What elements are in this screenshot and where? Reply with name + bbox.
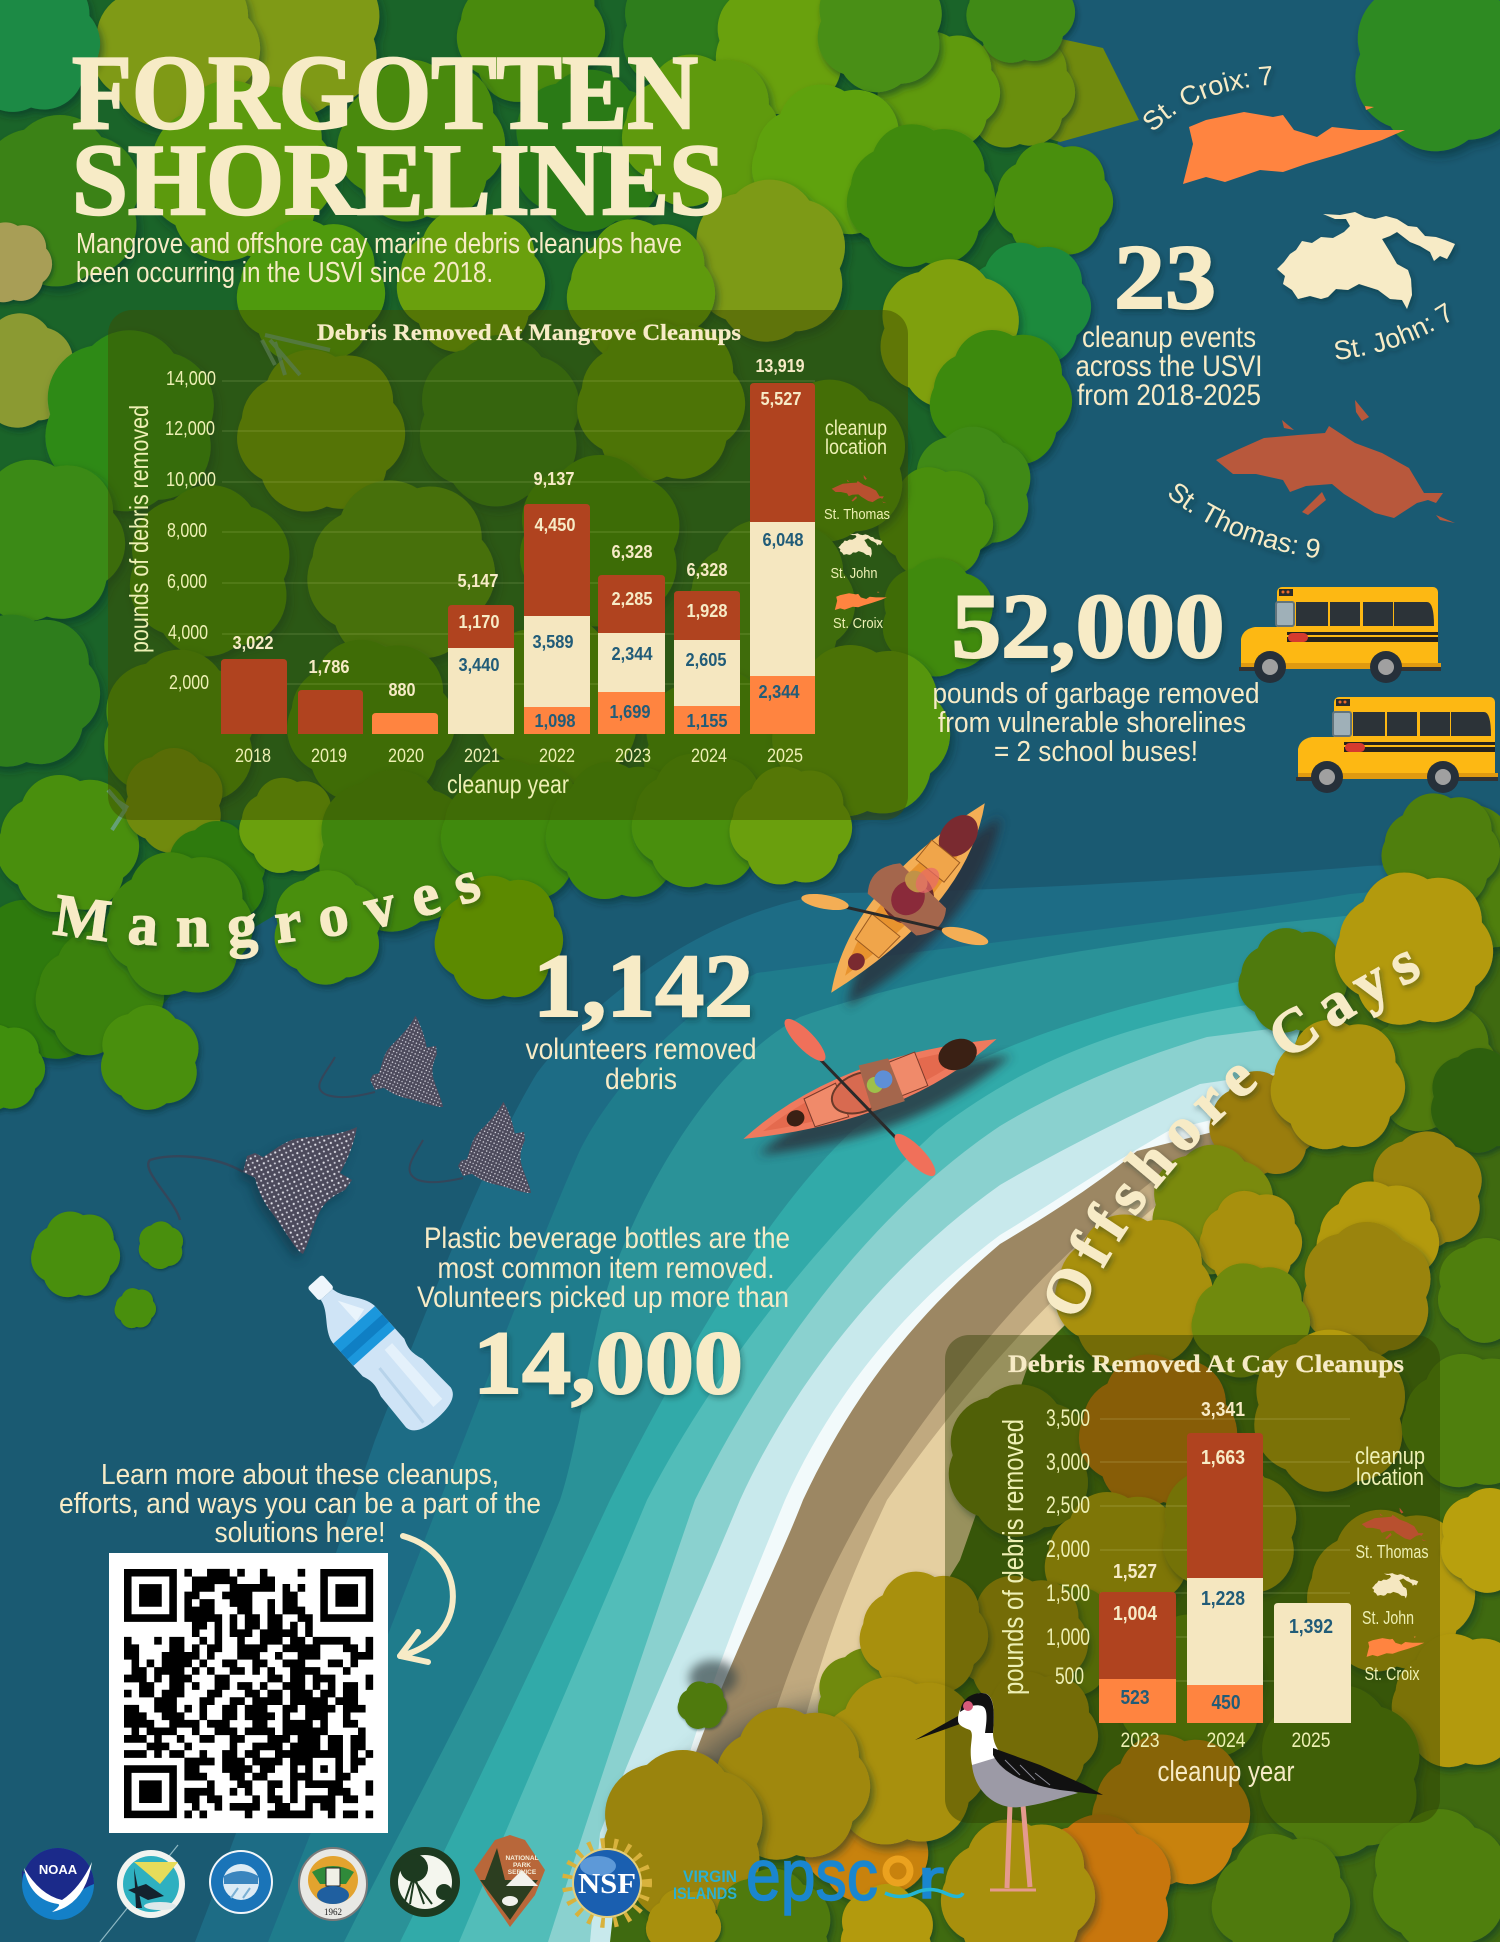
bar value labels: 4,450	[534, 515, 576, 535]
stat: 1,142 volunteers: debris	[605, 1063, 677, 1096]
bar value labels: 9,137	[534, 469, 574, 489]
legend: St. Thomas	[1356, 1542, 1428, 1562]
x axis: 2024	[1206, 1729, 1246, 1752]
bar value labels: 6,328	[686, 560, 728, 580]
logo: NSF	[567, 1843, 647, 1923]
logo: NOAA: NOAA	[39, 1862, 78, 1877]
x axis: 2020	[388, 746, 424, 767]
stat: 52,000 pounds: pounds of garbage removed	[932, 678, 1260, 710]
logo: National Park Service: SERVICE	[508, 1869, 537, 1876]
bar value labels: 1,928	[686, 601, 728, 621]
logo: Virgin Islands EPSCoR: ISLANDS	[673, 1884, 737, 1903]
bar value labels: 2,285	[612, 589, 652, 609]
bar value labels: 3,341	[1201, 1399, 1245, 1421]
bar value labels: 1,663	[1201, 1447, 1245, 1469]
bar value labels: 1,155	[686, 711, 728, 731]
legend: cleanup	[825, 417, 887, 440]
panel: mangrove chart backdrop	[108, 310, 908, 820]
island map: St. Croix	[1144, 66, 1405, 184]
call to action text: Learn more about these cleanups,	[101, 1459, 499, 1491]
QR code	[109, 1553, 388, 1833]
icon: school bus 2	[1296, 697, 1498, 793]
y axis: 2,500	[1046, 1492, 1090, 1519]
logo: National Park Service: PARK	[513, 1862, 531, 1869]
island map: St. Thomas: St. Thomas: 9	[1169, 484, 1324, 562]
chart: debris removed at mangrove cleanups	[124, 320, 890, 799]
legend: St. Thomas	[824, 506, 890, 523]
legend: cleanup	[1355, 1443, 1425, 1470]
y axis: 6,000	[167, 571, 207, 593]
stat: 1,142 volunteers	[526, 937, 756, 1096]
subtitle: been occurring in the USVI since 2018.	[76, 257, 493, 289]
bar value labels: 1,786	[308, 657, 350, 677]
bar value labels: 5,147	[458, 571, 498, 591]
stat: 23 cleanup events: from 2018-2025	[1077, 379, 1261, 412]
y axis: 1,000	[1046, 1624, 1090, 1651]
illustration: red kayak	[734, 1014, 1020, 1181]
x axis: cleanup year	[447, 769, 569, 799]
panel: cay chart backdrop	[945, 1335, 1440, 1823]
bar value labels: 3,440	[458, 655, 500, 675]
stat: plastic bottles text: Volunteers picked up more than	[417, 1281, 789, 1314]
y axis: 2,000	[169, 672, 209, 694]
illustration: black-necked stilt bird	[915, 1693, 1103, 1890]
palm frond leaves	[108, 335, 330, 830]
island map: St. Thomas	[1169, 400, 1455, 562]
illustration: eagle ray small top	[319, 1016, 472, 1133]
illustration: orange kayak	[800, 778, 1021, 1023]
y axis: pounds of debris removed	[998, 1419, 1030, 1695]
y axis: 4,000	[168, 622, 208, 644]
logo: Department of Planning and Natural Resources	[117, 1850, 185, 1918]
section label: Mangroves	[52, 872, 485, 964]
x axis: 2024	[691, 746, 727, 767]
stat: 23 cleanup events: 23	[1114, 226, 1216, 328]
x axis: 2025	[1292, 1729, 1330, 1752]
logo: NSF: NSF	[578, 1868, 636, 1900]
title: SHORELINES	[72, 124, 725, 237]
logo: Center for Marine and Environmental Studies	[209, 1850, 273, 1914]
island map: St. John: St. John: 7	[1335, 302, 1452, 364]
y axis: 12,000	[165, 418, 215, 440]
bar value labels: 1,004	[1113, 1603, 1158, 1625]
bar value labels: 1,228	[1201, 1588, 1245, 1610]
stat: 23 cleanup events: across the USVI	[1076, 350, 1262, 383]
section label: Offshore Cays: Offshore Cays	[1046, 951, 1424, 1320]
logo: University of the Virgin Islands: 1962	[324, 1907, 342, 1917]
x axis	[1120, 1729, 1330, 1788]
y axis: 3,500	[1046, 1405, 1090, 1432]
y axis: 14,000	[166, 368, 216, 390]
x axis	[235, 746, 803, 799]
stat: 1,142 volunteers: 1,142	[533, 937, 753, 1036]
title	[72, 34, 725, 237]
bar value labels: 13,919	[756, 356, 804, 376]
stacked bars	[221, 383, 815, 734]
logo: National Park Service: NATIONAL	[505, 1855, 539, 1862]
stat: 52,000 pounds	[932, 575, 1260, 768]
stat: 52,000 pounds: from vulnerable shorelines	[938, 707, 1246, 739]
legend: location	[825, 436, 887, 459]
bar value labels: 2,344	[758, 682, 800, 702]
legend: St. John	[830, 565, 878, 582]
y axis: pounds of debris removed	[124, 405, 154, 653]
bar value labels: 1,170	[458, 612, 500, 632]
subtitle	[76, 228, 682, 289]
legend: St. Croix	[1364, 1664, 1420, 1684]
icon: school bus 1	[1239, 587, 1441, 683]
chart title: Debris Removed At Mangrove Cleanups	[317, 320, 741, 345]
call to action text	[59, 1459, 541, 1549]
logo: Virgin Islands EPSCoR: r	[918, 1847, 944, 1910]
bar value labels: 2,344	[612, 644, 652, 664]
title: FORGOTTEN	[72, 34, 698, 151]
island map: St. Croix: St. Croix: 7	[1144, 66, 1274, 134]
x axis: 2023	[615, 746, 651, 767]
legend	[824, 417, 890, 632]
x axis: 2018	[235, 746, 271, 767]
stat: plastic bottles text: 14,000	[473, 1314, 743, 1413]
icon: plastic bottle	[292, 1261, 460, 1438]
partner logos	[22, 1835, 963, 1927]
bar value labels: 3,022	[232, 633, 274, 653]
stat: plastic bottles text: most common item removed.	[438, 1252, 774, 1285]
y axis: 2,000	[1046, 1536, 1090, 1563]
bar value labels: 5,527	[760, 389, 802, 409]
stat: plastic bottles text: Plastic beverage bottles are the	[424, 1222, 790, 1255]
stat: 23 cleanup events	[1076, 226, 1262, 412]
call to action text: solutions here!	[214, 1517, 386, 1549]
bar value labels	[232, 356, 804, 731]
logo: Virgin Islands EPSCoR: VIRGIN	[683, 1867, 737, 1886]
island map: St. John	[1277, 212, 1458, 364]
stat: 1,142 volunteers: volunteers removed	[526, 1033, 756, 1066]
illustration: eagle ray large	[148, 1127, 357, 1260]
bar value labels: 1,527	[1113, 1561, 1157, 1583]
x axis: cleanup year	[1158, 1756, 1295, 1788]
section label: Mangroves: Mangroves	[52, 872, 485, 964]
bar value labels: 2,605	[686, 650, 726, 670]
y axis: 500	[1055, 1663, 1084, 1690]
stacked bars	[1099, 1433, 1351, 1723]
x axis: 2021	[464, 746, 500, 767]
x axis: 2019	[311, 746, 347, 767]
stat: 52,000 pounds: = 2 school buses!	[994, 736, 1198, 768]
logo: University of the Virgin Islands	[299, 1848, 367, 1920]
logo: NOAA	[22, 1848, 94, 1920]
call to action text: efforts, and ways you can be a part of the	[59, 1488, 541, 1520]
chart: debris removed at cay cleanups	[998, 1351, 1428, 1788]
legend: location	[1356, 1464, 1424, 1491]
bar value labels: 6,328	[612, 542, 652, 562]
stat: 23 cleanup events: cleanup events	[1082, 321, 1256, 354]
logo: National Park Service	[474, 1835, 545, 1927]
y axis: 3,000	[1046, 1449, 1090, 1476]
mangrove tree canopy	[0, 0, 1500, 1110]
y axis	[998, 1405, 1350, 1695]
legend: St. John	[1362, 1608, 1414, 1628]
bar value labels	[1113, 1399, 1333, 1714]
legend	[1355, 1443, 1428, 1684]
small mangrove islets	[31, 1212, 727, 1729]
bar value labels: 1,098	[534, 711, 576, 731]
y axis: 1,500	[1046, 1580, 1090, 1607]
stat: 52,000 pounds: 52,000	[952, 575, 1224, 677]
bar value labels: 1,392	[1289, 1616, 1333, 1638]
y axis: 8,000	[167, 520, 207, 542]
logo: Mangrove marine sanctuary	[390, 1847, 460, 1917]
stat: plastic bottles text	[417, 1222, 790, 1413]
bar value labels: 1,699	[610, 702, 650, 722]
bar value labels: 3,589	[532, 632, 574, 652]
y axis	[124, 368, 815, 694]
illustration: eagle ray small bottom	[410, 1102, 560, 1219]
offshore cay tree canopy	[603, 793, 1500, 1942]
x axis: 2022	[539, 746, 575, 767]
bar value labels: 6,048	[762, 530, 804, 550]
legend: St. Croix	[833, 615, 883, 632]
x axis: 2025	[767, 746, 803, 767]
arrow to QR code	[400, 1536, 453, 1662]
bar value labels: 880	[388, 680, 416, 700]
chart title: Debris Removed At Cay Cleanups	[1008, 1351, 1404, 1378]
y axis: 10,000	[166, 469, 216, 491]
bar value labels: 523	[1120, 1687, 1150, 1709]
logo: Virgin Islands EPSCoR: epsc	[746, 1836, 878, 1916]
top-left corner water wedge	[62, 0, 132, 30]
shoreline water bands and beach	[100, 860, 1500, 1942]
bar value labels: 450	[1212, 1692, 1240, 1714]
subtitle: Mangrove and offshore cay marine debris cleanups have	[76, 228, 682, 260]
logo: Virgin Islands EPSCoR	[673, 1836, 963, 1916]
x axis: 2023	[1120, 1729, 1160, 1752]
